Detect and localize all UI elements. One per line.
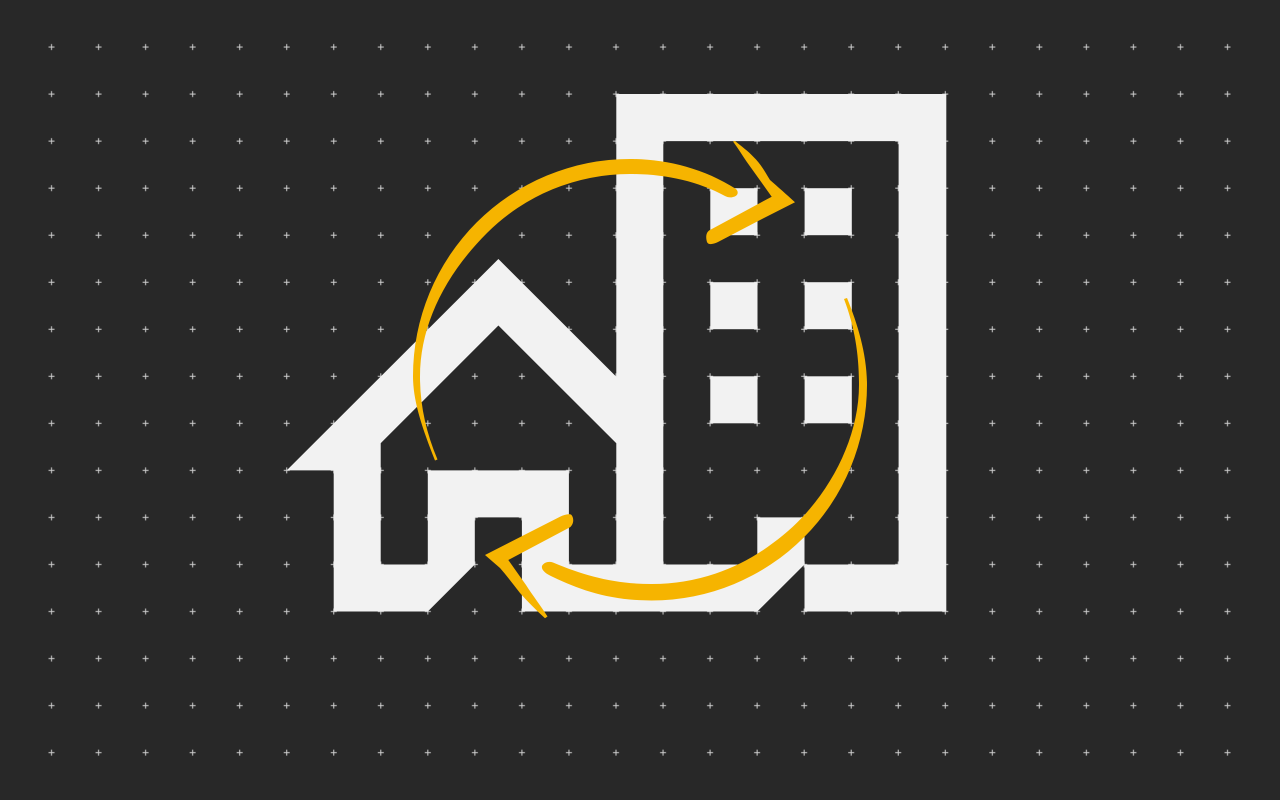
icon: circular exchange arrows <box>413 141 867 618</box>
house and building silhouette <box>287 94 946 612</box>
icon: house joined to apartment building <box>287 94 946 612</box>
arrowhead: upper right <box>706 141 795 244</box>
arrow: lower right arc <box>542 298 867 600</box>
building windows <box>710 188 852 423</box>
arrowhead: lower left <box>485 514 573 618</box>
arrow: upper left arc <box>413 159 738 460</box>
